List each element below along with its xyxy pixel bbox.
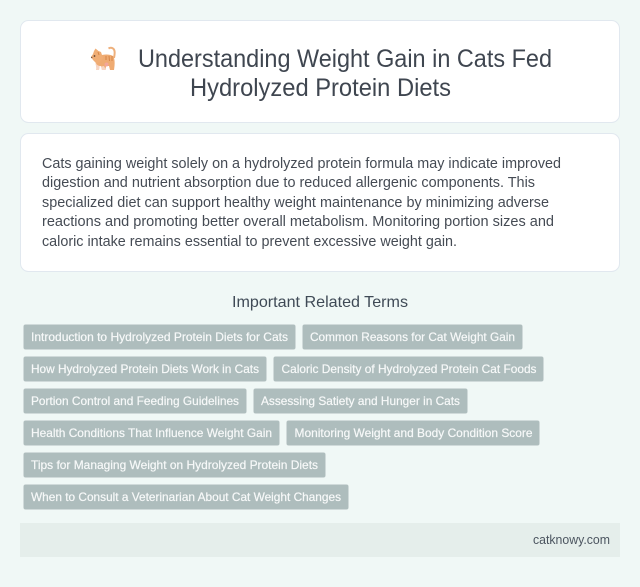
tag 8	[286, 420, 540, 446]
tag 2	[302, 324, 522, 350]
tag 10: When to Consult a Veterinarian About Cat Weight Changes	[31, 490, 341, 504]
description text: digestion and nutrient absorption due to reduced allergenic components. This	[42, 175, 535, 191]
tag 9: Tips for Managing Weight on Hydrolyzed Protein Diets	[31, 458, 318, 472]
title line 1: Understanding Weight Gain in Cats Fed	[138, 45, 552, 73]
tag 4	[274, 356, 544, 382]
footer source text: catknowy.com	[533, 533, 610, 547]
footer	[20, 523, 620, 557]
tag 6: Assessing Satiety and Hunger in Cats	[261, 394, 460, 408]
tag 7: Health Conditions That Influence Weight Gain	[31, 426, 272, 440]
tag 3	[24, 356, 266, 382]
tag 1	[24, 324, 296, 350]
tag 3: How Hydrolyzed Protein Diets Work in Cats	[31, 362, 259, 376]
heading: related terms: Important Related Terms	[232, 294, 408, 311]
tag 1: Introduction to Hydrolyzed Protein Diets for Cats	[31, 330, 288, 344]
panel: tags	[24, 324, 544, 510]
icon: cat	[91, 48, 115, 70]
description text: reactions and promoting better overall metabolism. Monitoring portion sizes and	[42, 214, 554, 230]
description text: specialized diet can support healthy weight maintenance by minimizing adverse	[42, 195, 549, 211]
tag 6	[254, 388, 468, 414]
tag 8: Monitoring Weight and Body Condition Score	[294, 426, 533, 440]
title line 2: Hydrolyzed Protein Diets	[190, 74, 451, 102]
panel: description card	[20, 134, 620, 272]
tag 5: Portion Control and Feeding Guidelines	[31, 394, 239, 408]
description text: Cats gaining weight solely on a hydrolyzed protein formula may indicate improved	[42, 156, 561, 172]
tag 10	[24, 484, 348, 510]
tag 5	[24, 388, 246, 414]
description text: caloric intake remains essential to prevent excessive weight gain.	[42, 234, 457, 250]
description text	[42, 156, 561, 250]
tag 9	[24, 452, 326, 478]
tag 4: Caloric Density of Hydrolyzed Protein Cat Foods	[282, 362, 536, 376]
tag 2: Common Reasons for Cat Weight Gain	[310, 330, 515, 344]
tag 7	[24, 420, 280, 446]
panel: title card	[20, 20, 620, 122]
